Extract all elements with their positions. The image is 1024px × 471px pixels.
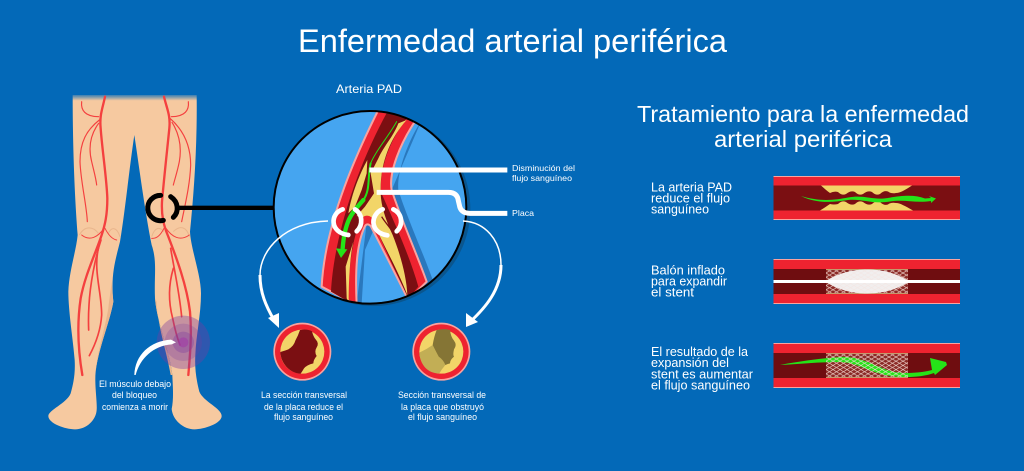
step 3 text: stent es aumentar [651,368,753,382]
leg caption: comienza a morir [102,402,168,412]
guide wire [774,280,960,283]
plaque remnant [826,269,908,294]
caption: right cross-section: la placa que obstruyó [401,402,484,412]
step 2 text: para expandir [651,274,727,288]
callout label: Disminución: flujo sanguíneo [512,173,572,183]
pain area concentric circles [157,316,210,369]
green flow arrow [343,122,397,248]
plaque cracks [381,216,390,230]
right leg arteries [152,97,191,375]
callout label: Disminución [512,163,575,183]
leg caption [99,379,171,412]
leg shading [96,282,172,375]
inflated balloon [825,270,909,294]
left leg arteries [78,97,117,375]
step 1 text: sanguíneo [651,202,709,216]
cross-section left [273,323,331,381]
step 1 vessel [774,176,960,220]
stent mesh [826,270,908,293]
caption: right cross-section: el flujo sanguíneo [408,412,477,422]
panel: magnified artery [273,110,507,306]
step 3 text: expansión del [651,356,729,370]
plaque upper right [357,120,407,295]
step 2 vessel [774,259,960,304]
green arrow head [336,248,347,258]
leg caption: del bloqueo [112,390,157,400]
legs [48,95,222,429]
step 2 text [651,264,727,300]
arrow: to left cross-section [260,221,328,328]
artery lumen [331,110,418,302]
caption: left cross-section: flujo sanguíneo [274,412,333,422]
step 2 text: el stent [651,286,695,300]
stent mesh overlay [826,354,908,377]
plaque upper left [348,160,367,213]
fade at top of legs [70,93,200,101]
connector line [178,206,276,210]
step 2 text: Balón inflado [651,264,725,278]
callout label: Placa: Placa [512,208,534,218]
heading: treatment: Tratamiento para la enfermedad [637,101,969,127]
callout label: Disminución: Disminución del [512,163,575,173]
caption: left cross-section [261,390,347,422]
plaque bottom [820,201,913,210]
lens circle [273,111,467,304]
leg caption: El músculo debajo [99,379,171,389]
heading: treatment: arterial periférica [714,126,892,152]
left plaque bracket [334,209,361,235]
panel: legs illustration [48,93,276,429]
step 3 text [651,345,753,392]
plaque top [821,186,912,195]
step 3 text: El resultado de la [651,345,748,359]
step 1 text [651,180,732,216]
stent [826,353,908,378]
knee creases [79,228,189,237]
plaque lower left [346,242,353,302]
heading: Arteria PAD: Arteria PAD [336,82,402,96]
caption: left cross-section: La sección transversal [261,390,347,400]
caption: left cross-section: de la placa reduce el [264,402,343,412]
arrow to pain area [134,340,176,375]
heading: treatment [637,101,969,152]
caption: right cross-section [398,390,486,422]
right plaque bracket [373,209,401,235]
callout lines [369,170,507,213]
lens shadow [276,112,470,306]
step 1 text: La arteria PAD [651,180,732,194]
step 3 text: el flujo sanguíneo [651,378,750,392]
step 1 text: reduce el flujo [651,192,730,206]
title: Enfermedad arterial periférica [298,23,727,59]
green flow arrow [801,196,936,203]
artery shadow [357,120,433,303]
balloon mesh [825,270,909,294]
magnifier bracket on knee [148,195,177,221]
lens ring [274,111,466,304]
artery wall [322,110,427,305]
step 3 vessel [774,343,960,388]
cross-section right [412,323,470,381]
green flow arrow [780,357,947,377]
caption: right cross-section: Sección transversal de [398,390,486,400]
arrow: to right cross-section [463,221,501,327]
